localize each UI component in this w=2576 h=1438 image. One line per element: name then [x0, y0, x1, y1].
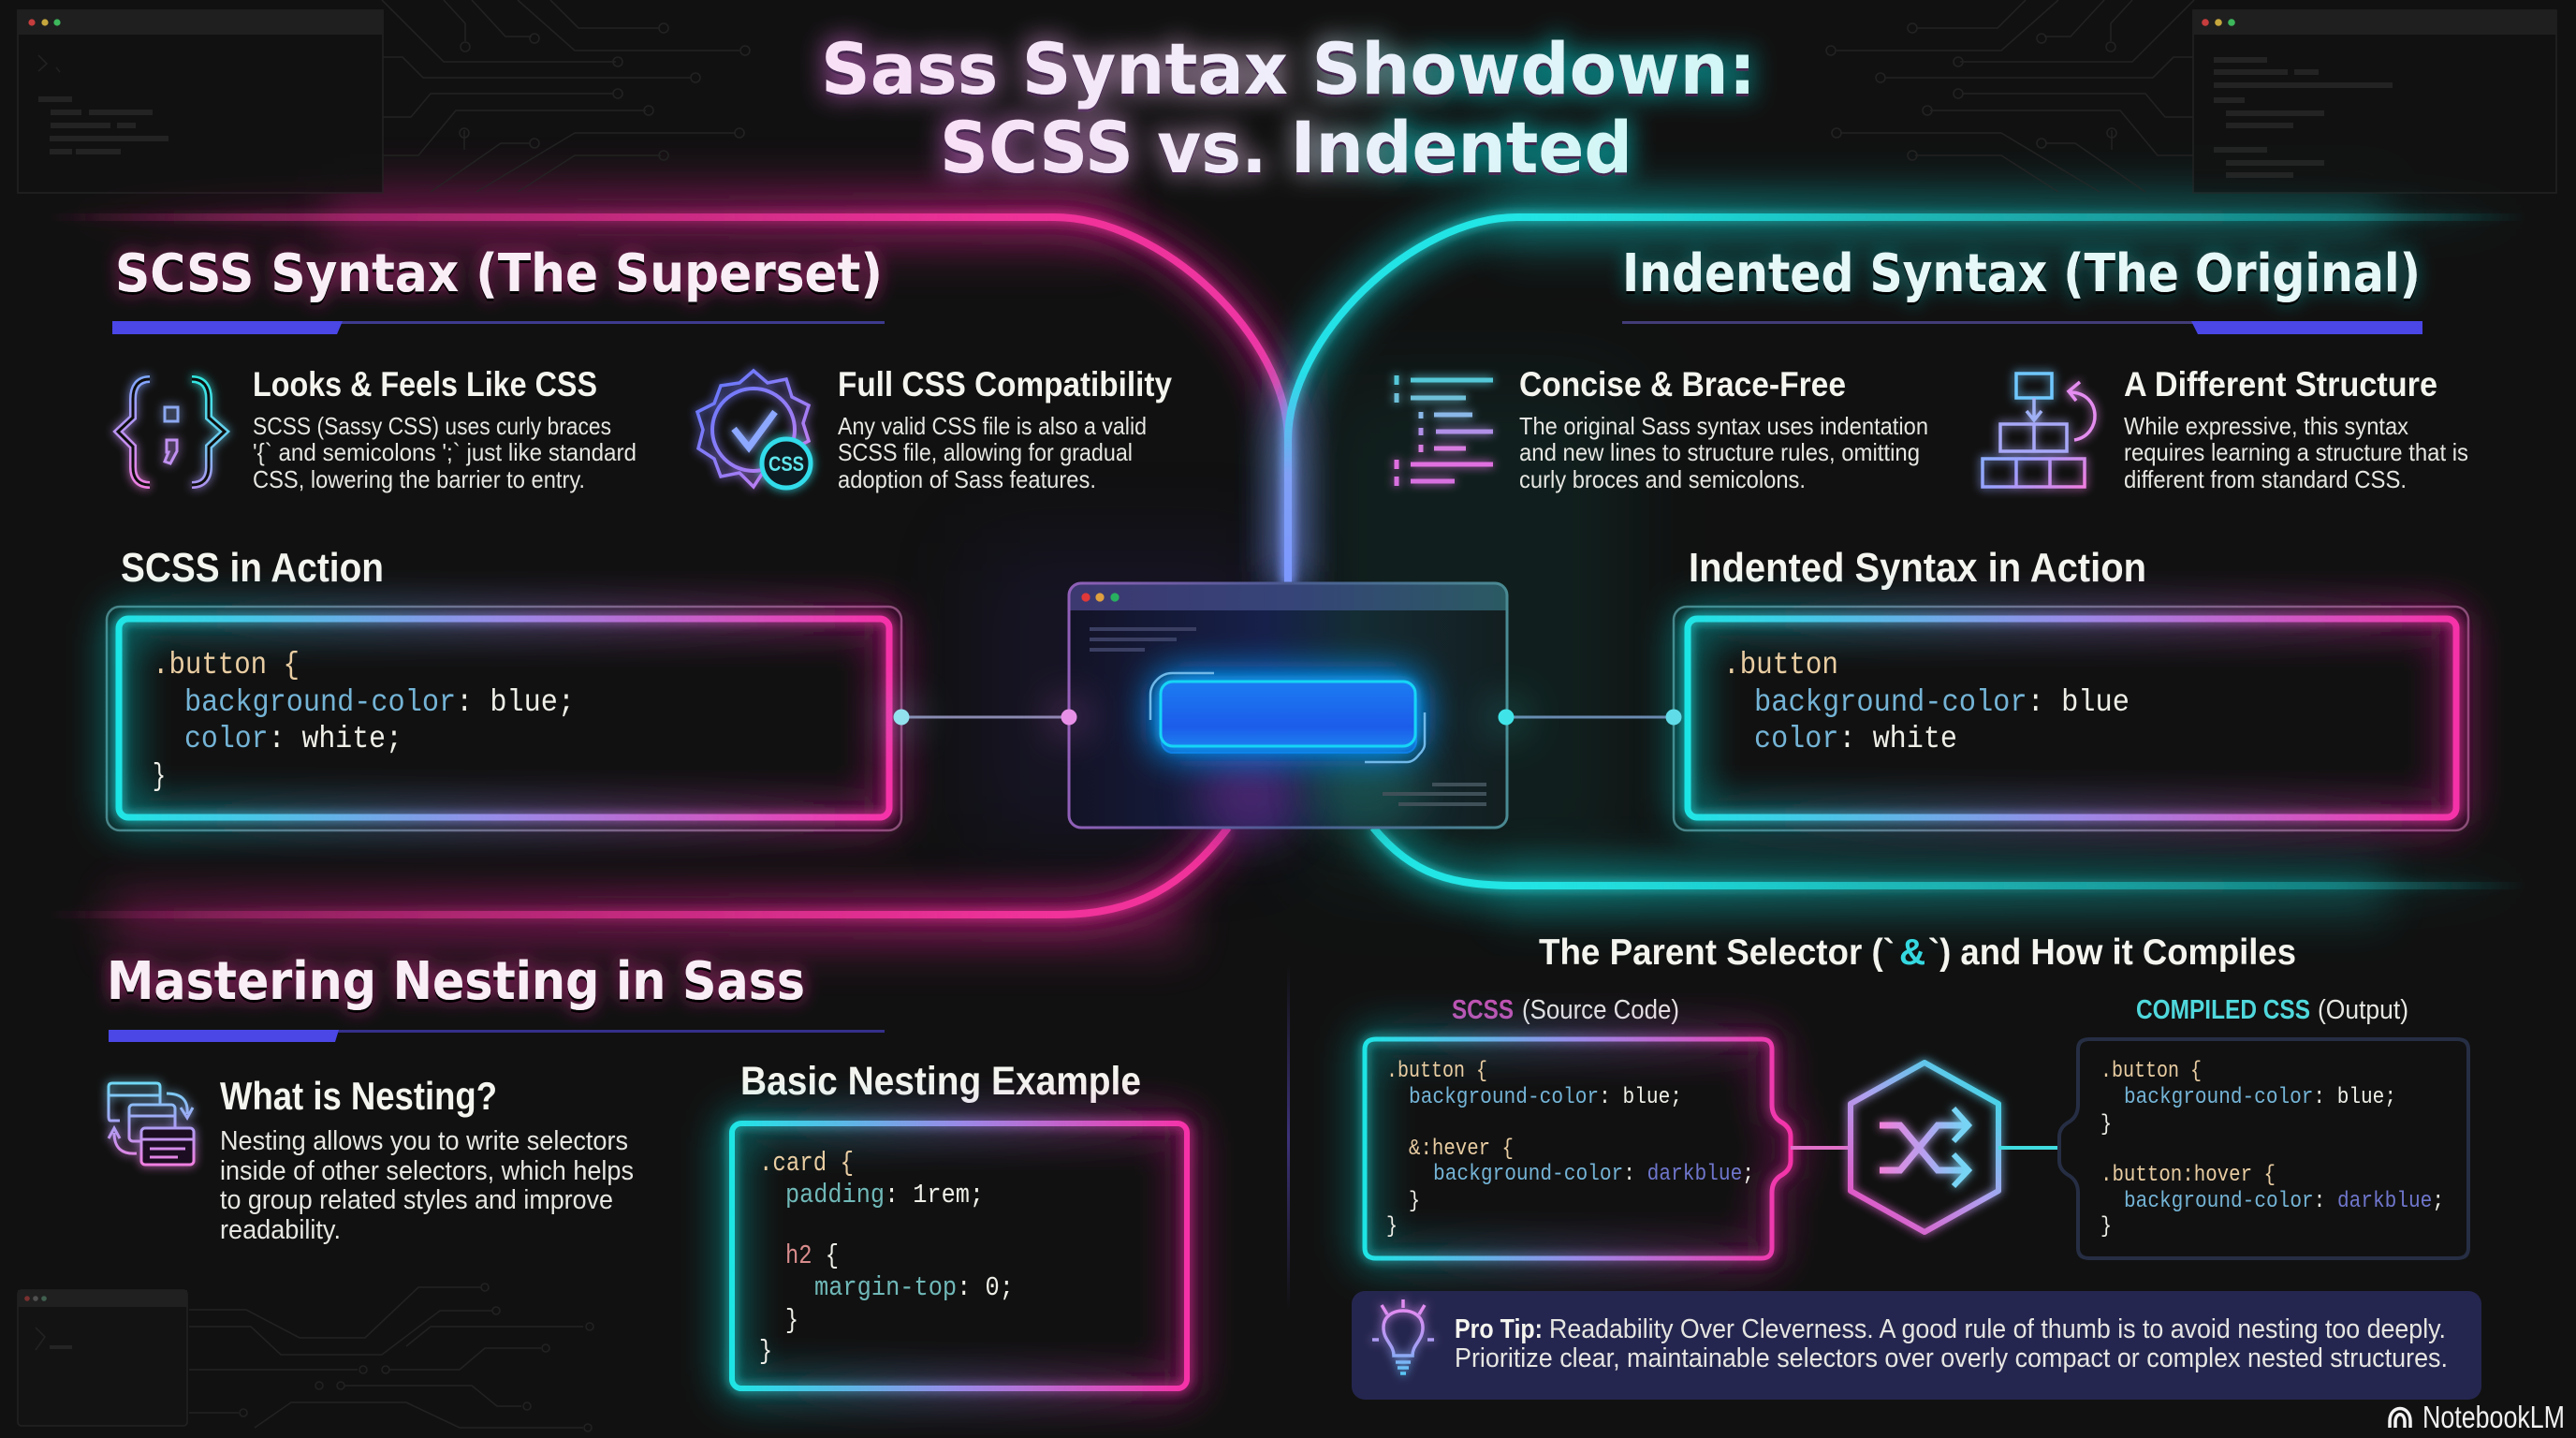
heading underline: Mastering — [109, 1030, 885, 1042]
feature: Looks & Feels Like CSS: SCSS (Sassy CSS) uses curly braces — [253, 412, 611, 440]
feature: Looks & Feels Like CSS: '{` and semicolons ';` just like standard — [253, 438, 637, 466]
callout: pro tip: Readability Over Cleverness. A good rule of thumb is to avoid nesting too deeply. — [1549, 1314, 2446, 1344]
neon line: pink SCSS top curve — [51, 217, 1288, 585]
feature: A Different Structure: different from standard CSS. — [2124, 465, 2407, 493]
icon: different structure — [1983, 374, 2095, 487]
feature: Looks & Feels Like CSS — [253, 365, 637, 493]
heading: Parent Selector: & — [1899, 932, 1925, 973]
panel: SCSS code box: } — [153, 759, 166, 794]
feature: A Different Structure: While expressive, this syntax — [2124, 412, 2408, 440]
panel: compiled CSS box: } — [2100, 1112, 2112, 1137]
panel: SCSS code box: .button { — [153, 648, 300, 682]
decoration: top-right code window — [2193, 10, 2556, 193]
decoration: top-left circuit traces — [382, 0, 750, 192]
panel: nesting code box — [732, 1123, 1187, 1388]
feature: Concise & Brace-Free: Concise & Brace-Free — [1519, 365, 1846, 404]
icon: CSS compatibility badge: CSS — [768, 452, 804, 476]
heading: Indented Syntax: Indented Syntax (The Original) — [1622, 243, 2421, 304]
label: compiled CSS output: COMPILED CSS — [2136, 995, 2310, 1025]
feature: Full CSS Compatibility: Any valid CSS file is also a valid — [838, 412, 1147, 440]
panel: compiled CSS box: background-color: blue; — [2124, 1085, 2396, 1110]
block: What is Nesting: inside of other selectors, which helps — [220, 1156, 634, 1186]
panel: SCSS source box: &:hever { — [1409, 1137, 1514, 1162]
heading: Parent Selector: The Parent Selector (` — [1539, 932, 1895, 973]
heading underline: SCSS — [112, 321, 885, 334]
panel: SCSS code box — [107, 607, 901, 830]
label: SCSS source code — [1452, 995, 1679, 1025]
panel: SCSS source box: background-color: blue; — [1409, 1085, 1682, 1110]
panel: Indented code box — [1674, 607, 2468, 830]
callout: pro tip — [1352, 1291, 2481, 1400]
neon line: cyan bottom curve — [1373, 828, 2525, 886]
feature: A Different Structure — [2124, 365, 2468, 493]
heading: Mastering Nesting: Mastering Nesting in Sass — [107, 951, 805, 1012]
panel: nesting code box: .card { — [759, 1148, 854, 1179]
title — [821, 27, 1756, 189]
feature: Full CSS Compatibility: adoption of Sass features. — [838, 465, 1096, 493]
icon: curly braces and semicolon — [118, 379, 225, 485]
panel: SCSS source box: } — [1386, 1214, 1398, 1240]
feature: Concise & Brace-Free — [1519, 365, 1928, 493]
label: SCSS source code: (Source Code) — [1522, 995, 1679, 1025]
panel: Indented code box: .button — [1723, 648, 1838, 682]
title: Sass Syntax Showdown: — [821, 27, 1756, 110]
connector: compile icon to output — [1998, 1146, 2059, 1150]
feature: Looks & Feels Like CSS: CSS, lowering the barrier to entry. — [253, 465, 585, 493]
panel: SCSS source box: } — [1409, 1189, 1420, 1214]
decoration: top-right circuit traces — [1826, 0, 2194, 192]
panel: SCSS code box: background-color: blue; — [184, 685, 575, 720]
block: What is Nesting: Nesting allows you to write selectors — [220, 1126, 628, 1156]
panel: nesting code box: } — [759, 1336, 772, 1367]
block: What is Nesting: readability. — [220, 1215, 341, 1245]
callout: pro tip: Pro Tip: — [1455, 1314, 1543, 1344]
panel: compiled CSS box: .button:hover { — [2100, 1163, 2276, 1188]
feature: Full CSS Compatibility — [838, 365, 1172, 493]
panel: SCSS source box: background-color: darkblue; — [1433, 1162, 1754, 1187]
heading underline: Indented — [1622, 321, 2422, 334]
icon: compile hexagon with shuffle arrows — [1851, 1063, 1998, 1232]
feature: Concise & Brace-Free: curly broces and semicolons. — [1519, 465, 1806, 493]
icon: nested windows — [109, 1083, 194, 1165]
connector: window to Indented box — [1489, 700, 1681, 734]
neon line: cyan Indented top curve — [1288, 217, 2525, 585]
neon line: pink bottom curve — [51, 828, 1228, 915]
block: What is Nesting: What is Nesting? — [220, 1074, 497, 1118]
panel: nesting code box: h2 { — [785, 1240, 839, 1271]
panel: SCSS source box: .button { — [1386, 1059, 1487, 1084]
connector: source to compile icon — [1791, 1146, 1851, 1150]
heading: SCSS Syntax: SCSS Syntax (The Superset) — [115, 243, 883, 304]
panel: SCSS source box — [1365, 1039, 1791, 1258]
panel: nesting code box: } — [785, 1305, 798, 1336]
feature: Full CSS Compatibility: SCSS file, allowing for gradual — [838, 438, 1133, 466]
feature: Concise & Brace-Free: The original Sass syntax uses indentation — [1519, 412, 1928, 440]
decoration: bottom-left terminal and circuit — [18, 1284, 593, 1431]
centre browser window with glowing button — [1069, 583, 1507, 843]
faint centre divider — [1287, 964, 1290, 1311]
panel: compiled CSS box — [2059, 1039, 2468, 1258]
panel: compiled CSS box: background-color: darkblue; — [2124, 1189, 2444, 1214]
panel: nesting code box: padding: 1rem; — [785, 1180, 984, 1211]
block: What is Nesting: to group related styles and improve — [220, 1185, 613, 1215]
heading: Parent Selector: `) and How it Compiles — [1928, 932, 2296, 973]
block: What is Nesting — [220, 1074, 634, 1245]
title: SCSS vs. Indented — [940, 106, 1632, 189]
panel: SCSS code box: color: white; — [184, 722, 402, 756]
callout: pro tip: Prioritize clear, maintainable selectors over overly compact or complex nested structures. — [1455, 1343, 2448, 1373]
heading: Parent Selector — [1539, 932, 2296, 973]
icon: CSS compatibility badge — [697, 371, 811, 488]
label: SCSS source code: SCSS — [1452, 995, 1514, 1025]
panel: compiled CSS box: } — [2100, 1214, 2112, 1240]
ambient glow — [112, 178, 2387, 955]
feature: Full CSS Compatibility: Full CSS Compatibility — [838, 365, 1172, 404]
connector: SCSS box to window — [885, 700, 1086, 734]
panel: Indented code box: background-color: blue — [1754, 685, 2130, 720]
panel: nesting code box: margin-top: 0; — [814, 1272, 1014, 1303]
panel: compiled CSS box: .button { — [2100, 1059, 2202, 1084]
icon: indented lines — [1397, 375, 1493, 486]
heading: Basic Nesting Example: Basic Nesting Example — [740, 1059, 1141, 1104]
heading: SCSS in Action: SCSS in Action — [121, 545, 384, 591]
panel: Indented code box: color: white — [1754, 722, 1957, 756]
feature: Looks & Feels Like CSS: Looks & Feels Like CSS — [253, 365, 597, 404]
feature: A Different Structure: requires learning a structure that is — [2124, 438, 2468, 466]
label: compiled CSS output: (Output) — [2318, 995, 2408, 1025]
feature: A Different Structure: A Different Structure — [2124, 365, 2437, 404]
feature: Concise & Brace-Free: and new lines to structure rules, omitting — [1519, 438, 1920, 466]
decoration: top-left terminal window — [18, 10, 383, 193]
heading: Indented Syntax in Action: Indented Syntax in Action — [1689, 545, 2146, 591]
